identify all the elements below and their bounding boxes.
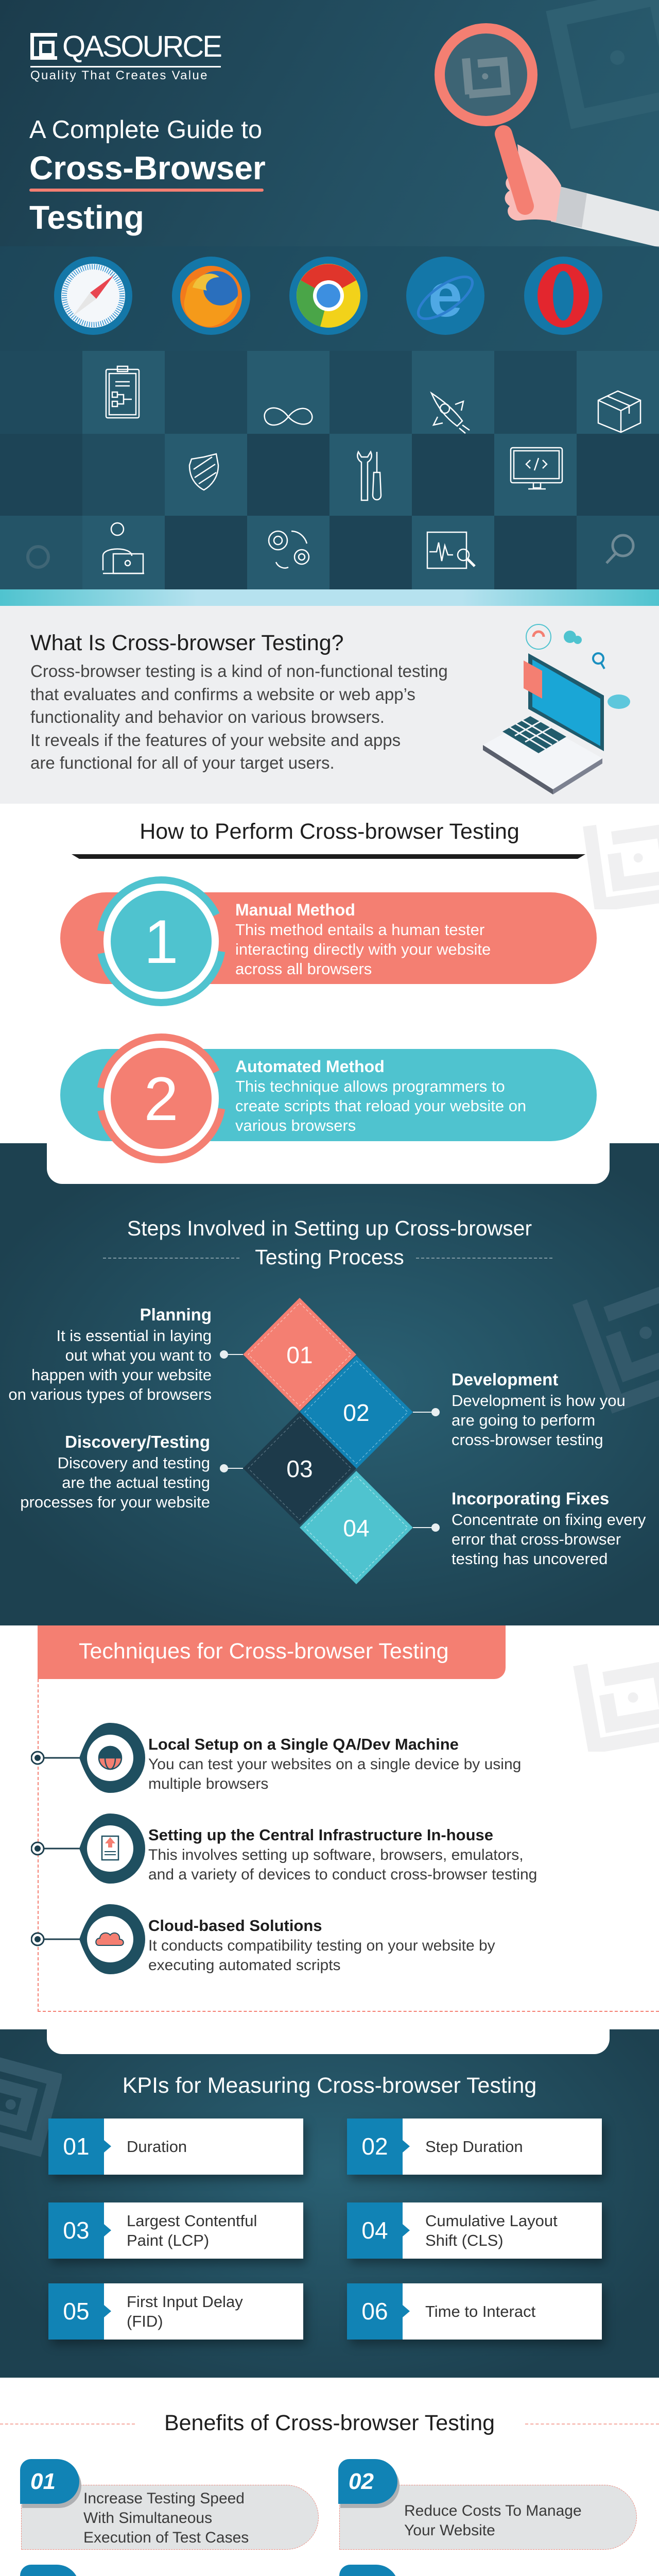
- diamond 02: 02: [343, 1399, 370, 1426]
- panel: automated method: [60, 1049, 597, 1141]
- benefit 01: With Simultaneous: [83, 2510, 212, 2527]
- text: planning: Planning: [140, 1305, 212, 1324]
- icon: number 1 circle: 1: [144, 907, 178, 976]
- KPI 03: Paint (LCP): [127, 2231, 209, 2249]
- dashed lines: [103, 1258, 239, 1259]
- text block: Cross-browser testing is a kind of non-functional testing: [30, 662, 448, 681]
- text: create scripts that reload your website on: [235, 1097, 526, 1115]
- heading: KPIs: KPIs for Measuring Cross-browser Testing: [123, 2073, 536, 2098]
- diamond 01: 01: [286, 1342, 313, 1368]
- text: This method entails a human tester: [235, 921, 484, 939]
- title: Cross-Browser: [29, 149, 266, 187]
- watermark logo techniques: [574, 1662, 659, 1752]
- icon: gears: [269, 531, 309, 568]
- technique 3: cloud: [31, 1904, 495, 1974]
- icon: document teardrop: [31, 1814, 145, 1884]
- title: Testing: [29, 199, 144, 236]
- technique 2: central infrastructure: Setting up the Central Infrastructure In-house: [148, 1826, 493, 1844]
- text: discovery/testing: Discovery and testing: [58, 1454, 210, 1472]
- text: development: [452, 1370, 626, 1449]
- text: development: cross-browser testing: [452, 1431, 603, 1449]
- text: [235, 1057, 526, 1134]
- text: incorporating fixes: testing has uncovered: [452, 1550, 608, 1568]
- text: various browsers: [235, 1116, 356, 1134]
- heading: techniques: Techniques for Cross-browser Testing: [79, 1639, 449, 1664]
- benefit 02: 02: [349, 2469, 374, 2494]
- technique 2: central infrastructure: This involves setting up software, browsers, emulators,: [148, 1846, 524, 1863]
- technique 1: local setup: [31, 1723, 521, 1793]
- benefit 02: [338, 2459, 637, 2550]
- icon: tools: [357, 452, 381, 500]
- icon: number 2 circle: 2: [144, 1064, 178, 1133]
- benefit 01: Execution of Test Cases: [83, 2529, 249, 2546]
- text: planning: [8, 1305, 212, 1403]
- icon: magnifier with hand: [435, 23, 659, 247]
- black underline bar: [72, 854, 585, 859]
- benefit 01: [20, 2459, 319, 2550]
- KPI 04: [347, 2202, 602, 2259]
- KPI 03: [48, 2202, 303, 2259]
- technique 3: cloud: executing automated scripts: [148, 1957, 341, 1974]
- icon: internet explorer: e: [428, 261, 462, 330]
- KPI 06: [347, 2283, 602, 2340]
- icon: shield: [189, 454, 218, 490]
- icon: number 2 circle: [97, 1033, 226, 1163]
- watermark logo top right: [546, 0, 659, 129]
- text: planning: on various types of browsers: [8, 1385, 212, 1403]
- KPI 05: [48, 2283, 303, 2340]
- icon: safari: [54, 257, 132, 335]
- icon: internet explorer: [406, 257, 484, 335]
- text: planning: It is essential in laying: [56, 1327, 212, 1345]
- text: discovery/testing: Discovery/Testing: [65, 1432, 210, 1451]
- text: incorporating fixes: [452, 1489, 646, 1568]
- technique 1: local setup: You can test your websites on a single device by using: [148, 1756, 521, 1773]
- diamond 03: [243, 1412, 356, 1525]
- heading: steps: Testing Process: [255, 1245, 404, 1269]
- logo: QASOURCE: [62, 30, 221, 63]
- heading: steps: [127, 1216, 532, 1269]
- KPI 01: 01: [63, 2133, 90, 2160]
- KPI 05: (FID): [127, 2312, 163, 2330]
- text block: It reveals if the features of your website and apps: [30, 731, 401, 749]
- icon: box: [598, 391, 640, 432]
- icon: laptop illustration: [483, 624, 630, 794]
- text: Automated Method: [235, 1057, 385, 1076]
- panel: what is cross-browser testing: [0, 606, 659, 804]
- panel: steps section background: [0, 1143, 659, 1625]
- diamond 04: [300, 1471, 413, 1584]
- icon: person at laptop: [103, 523, 144, 573]
- text: planning: happen with your website: [31, 1366, 212, 1384]
- icon: cloud teardrop: [31, 1904, 145, 1974]
- text: planning: out what you want to: [65, 1346, 212, 1364]
- technique 1: local setup: Local Setup on a Single QA/Dev Machine: [148, 1735, 459, 1753]
- icon: chrome: [289, 257, 368, 335]
- KPI 03: 03: [63, 2217, 90, 2244]
- watermark logo kpi: [0, 2058, 62, 2157]
- logo: [30, 30, 221, 82]
- icon: gear outline: [28, 547, 48, 567]
- white card bottom 2: [47, 2029, 610, 2054]
- text block: functionality and behavior on various browsers.: [30, 707, 385, 726]
- icon: globe teardrop: [31, 1723, 145, 1793]
- text: incorporating fixes: Incorporating Fixes: [452, 1489, 609, 1508]
- icon: code monitor: [511, 448, 562, 489]
- KPI 06: 06: [361, 2298, 388, 2325]
- KPI 01: [48, 2119, 303, 2175]
- diamond 01: [243, 1298, 356, 1411]
- KPI 04: 04: [361, 2217, 388, 2244]
- teal gradient bar: [0, 589, 659, 606]
- icon: opera: [524, 257, 602, 335]
- icon: firefox: [172, 257, 250, 335]
- KPI 04: Cumulative Layout: [425, 2211, 558, 2230]
- icon: clipboard: [106, 366, 139, 418]
- diamond 03: 03: [286, 1455, 313, 1482]
- text: incorporating fixes: error that cross-browser: [452, 1530, 621, 1548]
- text: discovery/testing: processes for your website: [20, 1493, 210, 1511]
- KPI 05: First Input Delay: [127, 2293, 243, 2310]
- technique 3: cloud: Cloud-based Solutions: [148, 1917, 322, 1935]
- text: development: Development: [452, 1370, 558, 1389]
- KPI 03: Largest Contentful: [127, 2211, 257, 2230]
- heading: steps: Steps Involved in Setting up Cross-browser: [127, 1216, 532, 1240]
- KPI 06: Time to Interact: [425, 2302, 535, 2320]
- technique 3: cloud: It conducts compatibility testing on your website by: [148, 1937, 495, 1954]
- browser band: [0, 246, 659, 351]
- watermark logo right: [583, 825, 659, 909]
- icon: monitor search: [427, 532, 475, 568]
- grid icons: [26, 366, 641, 574]
- technique 2: central infrastructure: [31, 1814, 537, 1884]
- heading: how to perform: How to Perform Cross-browser Testing: [140, 819, 519, 844]
- text block: are functional for all of your target users.: [30, 753, 335, 772]
- dashed frame: [38, 1679, 659, 2012]
- diamond 04: 04: [343, 1515, 370, 1541]
- title: A Complete Guide to: [29, 116, 262, 144]
- text: across all browsers: [235, 960, 372, 978]
- panel: manual method: [60, 892, 597, 984]
- heading: What Is Cross-browser Testing?: [30, 631, 344, 655]
- KPI 02: 02: [361, 2133, 388, 2160]
- icon grid: [0, 351, 659, 589]
- icon: logo box: [30, 33, 57, 60]
- KPI 01: Duration: [127, 2137, 187, 2156]
- white card bottom: [47, 1143, 610, 1184]
- chart: step diamonds: [220, 1298, 440, 1584]
- icon: rocket: [431, 393, 470, 433]
- icon: number 1 circle: [97, 876, 226, 1006]
- logo: Quality That Creates Value: [30, 69, 209, 82]
- KPI 05: 05: [63, 2298, 90, 2325]
- diamond 02: [300, 1355, 413, 1469]
- text: [235, 901, 491, 978]
- watermark logo dark: [573, 1287, 659, 1414]
- KPI 02: [347, 2119, 602, 2175]
- text block: that evaluates and confirms a website or web app’s: [30, 684, 415, 704]
- text: Manual Method: [235, 901, 355, 919]
- text: discovery/testing: [20, 1432, 210, 1511]
- icon: search faint: [606, 535, 633, 563]
- text: This technique allows programmers to: [235, 1077, 505, 1095]
- text: incorporating fixes: Concentrate on fixing every: [452, 1511, 646, 1529]
- text block: [30, 662, 448, 772]
- icon: infinity: [265, 408, 312, 425]
- technique 1: local setup: multiple browsers: [148, 1775, 268, 1792]
- benefit 01: Increase Testing Speed: [83, 2490, 245, 2507]
- benefit 02: Your Website: [404, 2522, 495, 2539]
- text: development: Development is how you: [452, 1392, 626, 1410]
- KPI 02: Step Duration: [425, 2137, 523, 2156]
- header background: [0, 0, 659, 351]
- text: development: are going to perform: [452, 1411, 595, 1429]
- KPI 04: Shift (CLS): [425, 2231, 504, 2249]
- text: discovery/testing: are the actual testing: [62, 1473, 210, 1492]
- benefit 02: Reduce Costs To Manage: [404, 2502, 582, 2519]
- heading: techniques: [38, 1625, 506, 1679]
- technique 2: central infrastructure: and a variety of devices to conduct cross-browser testing: [148, 1866, 537, 1883]
- benefit 01: 01: [30, 2469, 56, 2494]
- panel: KPI section background: [0, 2029, 659, 2378]
- heading: benefits: Benefits of Cross-browser Testing: [164, 2411, 495, 2435]
- text: interacting directly with your website: [235, 940, 491, 958]
- title: [29, 116, 266, 236]
